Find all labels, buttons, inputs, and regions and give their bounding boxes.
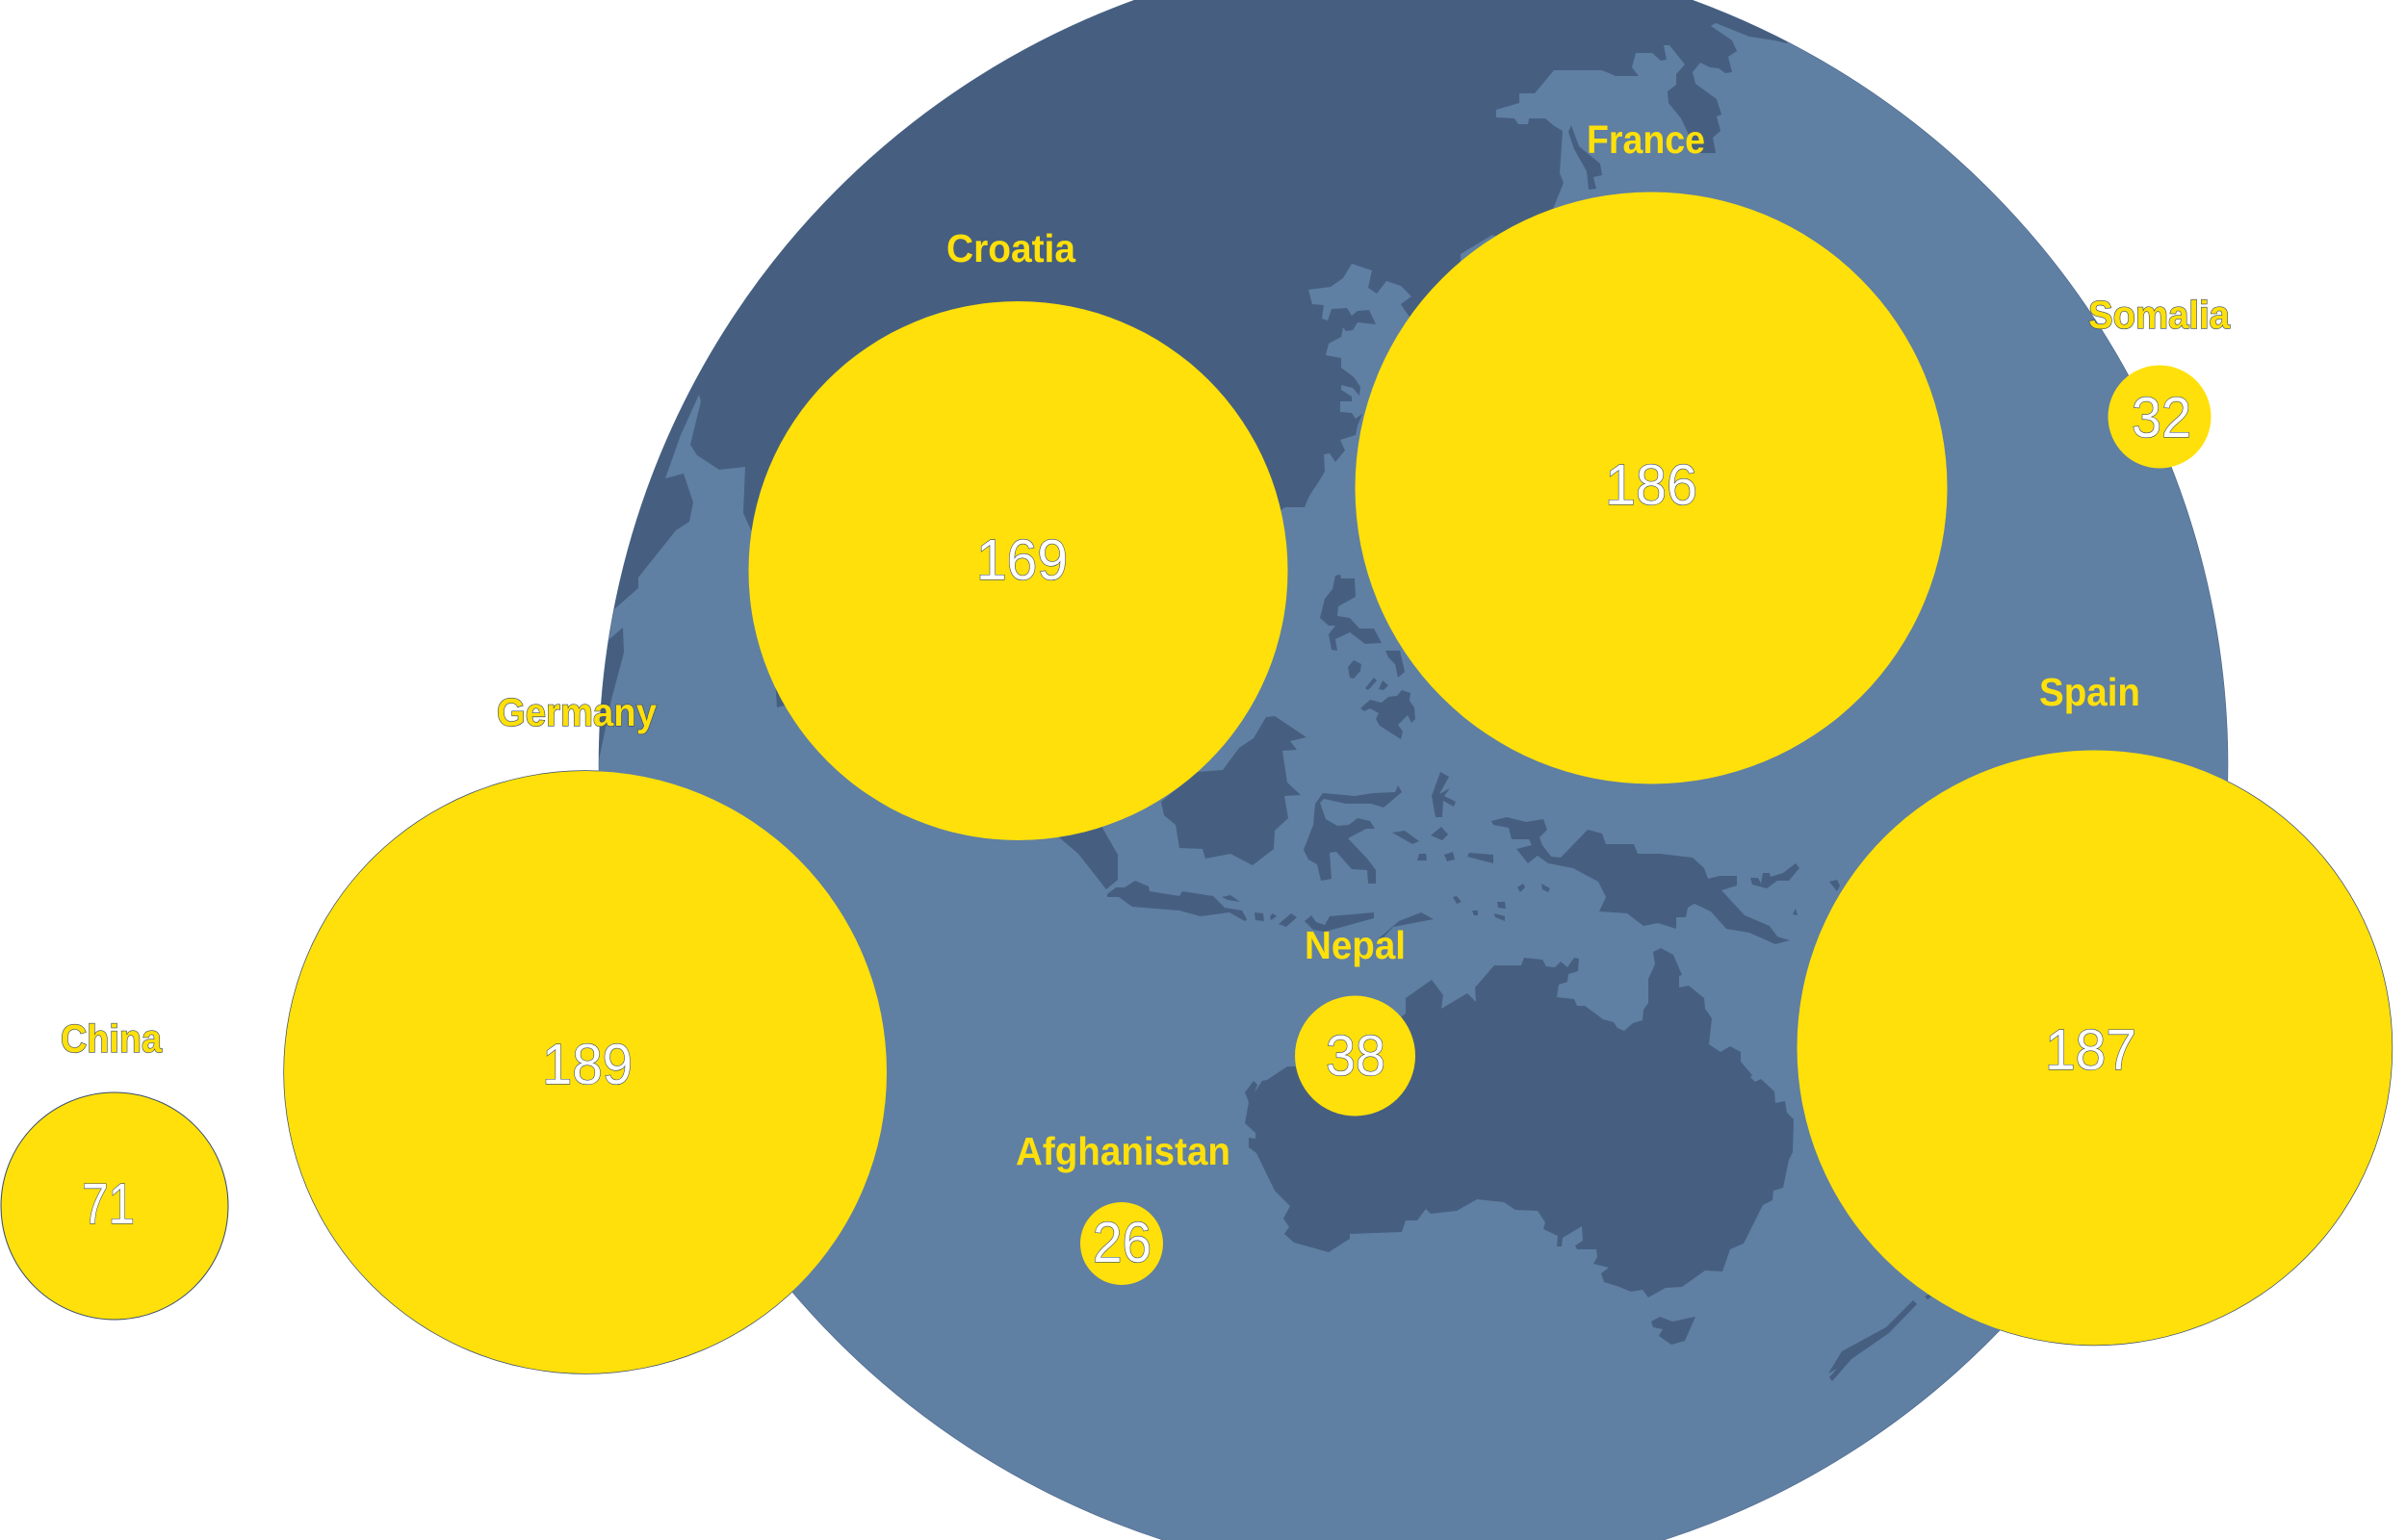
land: New Zealand [1828, 1295, 1931, 1381]
bubble: China 71: 71 [82, 1172, 135, 1236]
bubble: Somalia 32: 32 [2132, 386, 2191, 449]
bubble: Spain 187 [1797, 670, 2392, 1346]
label: China: China [61, 1016, 163, 1061]
globe map [481, 0, 2228, 1540]
bubble: Afghanistan 26: 26 [1093, 1211, 1151, 1274]
bubble: Germany 189: 189 [542, 1033, 633, 1096]
label: Spain: Spain [2039, 670, 2140, 714]
land masses [481, 0, 1931, 1381]
bubble: Nepal 38 [1295, 923, 1415, 1116]
land: west edge [599, 628, 624, 759]
label: Somalia: Somalia [2088, 293, 2231, 337]
land: New Britain and small islands [1750, 863, 1840, 915]
globe ocean disc [599, 0, 2228, 1540]
land: sliver island [1568, 125, 1602, 190]
land: Halmahera and Moluccas [1392, 772, 1550, 921]
bubble: Afghanistan 26 [1016, 1129, 1230, 1285]
label: Croatia: Croatia [946, 226, 1076, 270]
land: Australia [1245, 948, 1794, 1297]
label: Nepal: Nepal [1305, 923, 1406, 967]
land: Sumatra [1059, 827, 1118, 889]
bubble: Croatia 169 [749, 226, 1288, 840]
land: New Guinea [1491, 817, 1790, 944]
bubble: France 186 [1356, 117, 1947, 783]
land: Sulawesi [1304, 785, 1402, 884]
land: Borneo [1161, 716, 1306, 865]
land: Asia mainland [614, 0, 1788, 707]
bubble: Somalia 32 [2088, 293, 2231, 468]
bubble: Croatia 169: 169 [976, 528, 1068, 592]
label: Afghanistan: Afghanistan [1016, 1129, 1230, 1173]
bubble: Spain 187: 187 [2045, 1018, 2136, 1082]
land: Tasmania [1651, 1317, 1695, 1345]
land: Java and lesser islands [1107, 881, 1434, 938]
bubble: Nepal 38: 38 [1326, 1024, 1385, 1088]
bubble: Germany 189 [284, 690, 887, 1373]
land: Philippines [1320, 575, 1415, 739]
bubble: France 186: 186 [1605, 453, 1697, 517]
label: France: France [1587, 117, 1705, 162]
bubble: China 71 [1, 1016, 228, 1320]
label: Germany: Germany [497, 690, 657, 734]
